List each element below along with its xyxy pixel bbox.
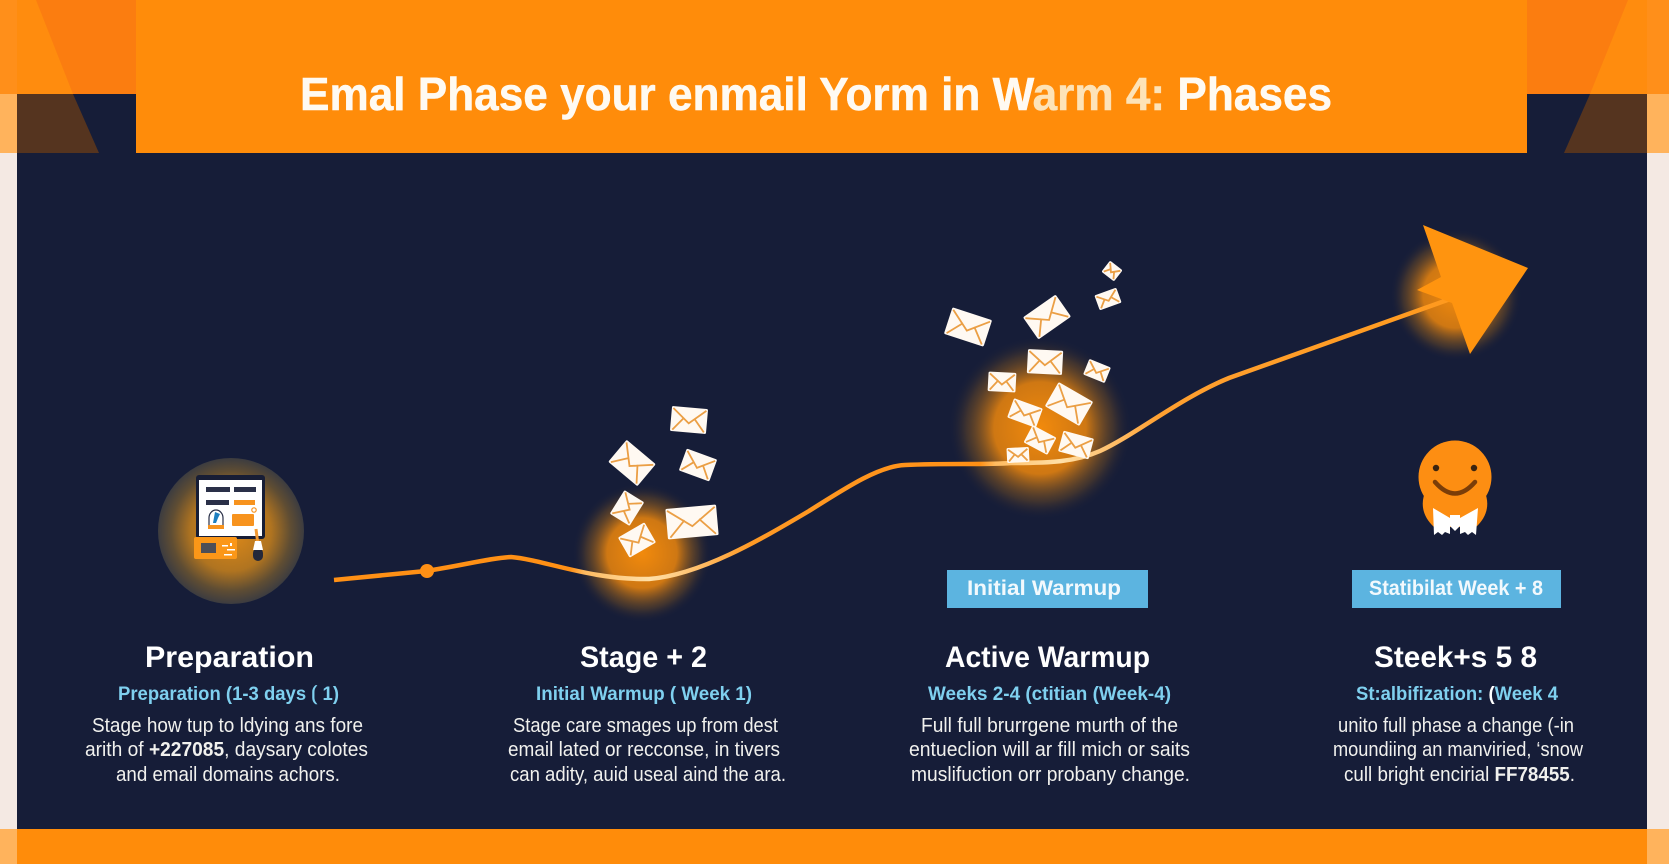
subheading: Preparation (1-3 days ⟮ 1) [118,683,339,705]
curve start dot [420,564,434,578]
icon: smiling mascot [1418,440,1492,535]
label: stabilization week: Statibilat Week + 8 [1369,577,1543,600]
top right corner decoration [1527,0,1647,153]
description [1333,714,1583,786]
subheading: Weeks 2-4 (ctitian (Week-4) [928,683,1171,705]
left edge strip [0,0,17,864]
arrow head [1417,225,1528,354]
heading: Steek+s 5 8 [1374,641,1537,674]
subheading: St:albifization: (Week 4 [1356,683,1558,705]
envelopes: initial warmup [610,408,717,556]
heading: Stage + 2 [580,641,707,674]
head [1418,440,1492,514]
heading: Active Warmup [945,641,1150,674]
growth curve [334,298,1453,580]
description: Full full brurrgene murth of the [921,714,1178,737]
top left corner decoration [17,0,136,153]
subheading: Initial Warmup ( Week 1) [536,683,752,705]
heading: Preparation [145,641,314,674]
panel: preparation [85,641,368,786]
bow tie [1433,508,1478,535]
bottom band [17,829,1647,864]
icon: preparation dashboard [158,458,304,604]
mouse [253,529,263,561]
panel: stage 2 [508,641,786,786]
glow: initial warmup [572,483,712,623]
icon backdrop circle [158,458,304,604]
glow: active warmup [948,336,1132,520]
envelopes: active warmup [946,263,1120,461]
description [508,714,786,786]
id card [194,537,237,559]
monitor [196,475,265,539]
panel: active warmup [909,641,1190,786]
label: initial warmup [947,570,1148,608]
description [85,714,368,786]
description: and email domains achors. [116,763,340,786]
description: entueclion will ar fill mich or saits [909,738,1190,761]
eyes [1433,465,1477,471]
description [909,714,1190,786]
label: stabilization week [1352,570,1561,608]
smile [1435,482,1475,494]
description: muslifuction orr probany change. [911,763,1190,786]
description: unito full phase a change (-in [1338,714,1574,737]
description: can adity, auid useal aind the ara. [510,763,786,786]
header band [136,0,1527,153]
right edge strip [1647,0,1669,864]
description: Stage care smages up from dest [513,714,778,737]
body [1423,490,1487,527]
panel: stabilization [1333,641,1583,786]
title: Emal Phase your enmail Yorm in Warm 4: Phases [300,68,1332,120]
description: email lated or recconse, in tivers [508,738,780,761]
description: arith of +227085, daysary colotes [85,738,368,761]
glow: arrow tip [1390,229,1522,361]
description: cull bright encirial FF78455. [1344,763,1575,786]
label: initial warmup: Initial Warmup [967,577,1121,600]
description: moundiing an manviried, ‘snow [1333,738,1583,761]
description: Stage how tup to ldying ans fore [92,714,363,737]
